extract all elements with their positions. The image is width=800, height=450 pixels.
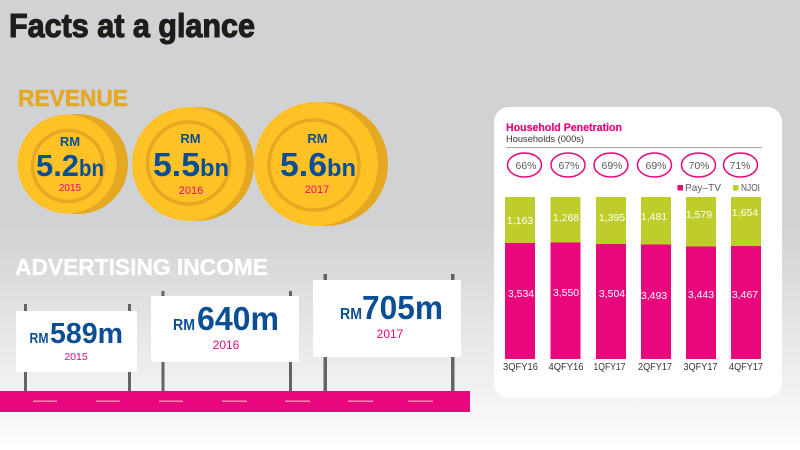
chart subheading: Households (000s) [506, 134, 584, 145]
penetration percentage labels: 66% [515, 160, 537, 172]
stacked bar chart: 3QFY16 [503, 362, 538, 373]
penetration percentage ovals [508, 153, 758, 177]
coin: 2015 revenue: bn [79, 155, 104, 181]
billboard: 2017 advertising income: 705m [362, 289, 443, 326]
penetration percentage labels [515, 160, 751, 172]
stacked bar chart: 1,163 [507, 215, 533, 227]
coin: 2017 revenue [254, 102, 388, 226]
penetration percentage labels: 69% [645, 160, 667, 172]
stacked bar chart: 3,493 [641, 290, 667, 302]
heading: revenue: REVENUE [18, 85, 128, 111]
stacked bar chart: 3,550 [553, 287, 579, 299]
stacked bar chart: 1,395 [599, 212, 625, 224]
penetration percentage labels: 71% [729, 160, 751, 172]
billboard: 2015 advertising income: RM [30, 330, 48, 347]
coin: 2016 revenue: bn [200, 155, 229, 182]
legend: NJOI [741, 182, 760, 194]
title: Facts at a glance [9, 7, 255, 44]
penetration percentage labels: 67% [558, 160, 580, 172]
stacked bar chart [503, 197, 763, 373]
billboard: 2016 advertising income [151, 291, 299, 391]
legend [678, 182, 760, 194]
stacked bar chart: 1,654 [732, 207, 758, 219]
penetration percentage labels: 70% [688, 160, 710, 172]
stacked bar chart: 3,467 [732, 289, 758, 301]
coin: 2016 revenue: 5.5 [153, 146, 200, 183]
billboard: 2017 advertising income [313, 274, 461, 391]
coin: 2015 revenue: 5.2 [36, 148, 79, 183]
panel: household penetration [494, 107, 782, 398]
billboard: 2017 advertising income: RM [340, 306, 362, 323]
chart heading: Household Penetration [506, 122, 622, 134]
billboard: 2015 advertising income [16, 304, 137, 391]
billboard: 2015 advertising income: 2015 [64, 351, 88, 363]
coin: 2017 revenue: RM [307, 131, 328, 146]
stacked bar chart: 2QFY17 [638, 362, 672, 373]
stacked bar chart: 4QFY16 [548, 362, 584, 373]
coin: 2016 revenue [132, 107, 254, 221]
billboard: 2016 advertising income: RM [173, 317, 195, 334]
coin: 2017 revenue: bn [327, 155, 356, 182]
legend: Pay–TV [685, 182, 721, 194]
billboard: 2016 advertising income: 2016 [213, 338, 240, 352]
stacked bar chart: 4QFY17 [729, 362, 763, 373]
stacked bar chart: 3,534 [508, 288, 534, 300]
stacked bar chart: 1QFY17 [594, 362, 626, 373]
billboard: 2016 advertising income: 640m [197, 300, 279, 337]
penetration percentage labels: 69% [601, 160, 623, 172]
stacked bar chart: 3QFY17 [684, 362, 718, 373]
coin: 2015 revenue [18, 114, 128, 214]
heading: advertising income: ADVERTISING INCOME [15, 254, 268, 280]
coin: 2017 revenue: 5.6 [280, 146, 327, 183]
billboard: 2017 advertising income: 2017 [377, 327, 404, 341]
stacked bar chart: 3,504 [599, 288, 625, 300]
billboard: 2015 advertising income: 589m [50, 318, 123, 350]
coin: 2016 revenue: RM [180, 131, 201, 146]
coin: 2017 revenue: 2017 [305, 184, 329, 196]
coin: 2016 revenue: 2016 [179, 185, 203, 197]
stacked bar chart: 1,481 [641, 211, 667, 223]
stacked bar chart: 3,443 [688, 289, 714, 301]
coin: 2015 revenue: 2015 [59, 183, 82, 194]
stacked bar chart: 1,268 [553, 212, 579, 224]
stacked bar chart: 1,579 [686, 209, 712, 221]
coin: 2015 revenue: RM [60, 134, 80, 149]
road [0, 391, 470, 412]
